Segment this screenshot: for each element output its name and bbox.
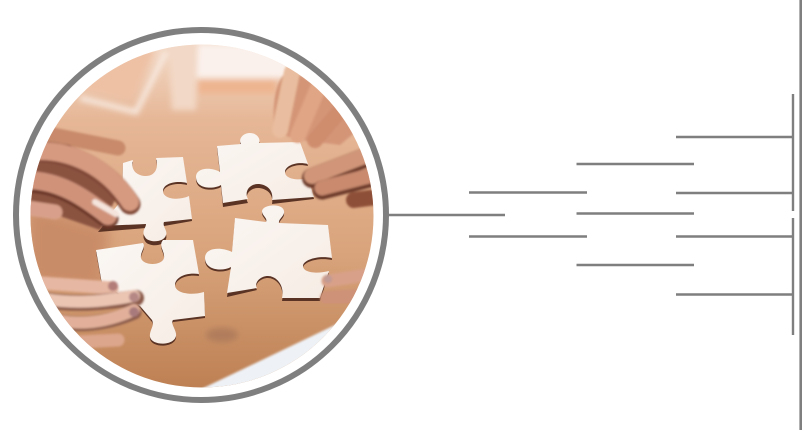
hand: top left <box>25 130 130 230</box>
lower bracket <box>792 218 794 335</box>
photo: hands assembling puzzle pieces <box>25 44 385 392</box>
hand: top right <box>273 68 385 200</box>
level 1 lines <box>469 192 587 236</box>
puzzle piece: bottom right <box>205 205 332 301</box>
hand: bottom right <box>324 272 385 298</box>
white tablet corner at bottom <box>201 323 336 388</box>
arm shadow at left <box>30 216 112 287</box>
right vertical rule <box>799 0 802 430</box>
upper bracket <box>792 94 794 211</box>
level 2 lines <box>576 164 694 265</box>
hand: bottom left <box>28 281 139 342</box>
puzzle piece: top left <box>98 157 192 245</box>
blurred objects on table <box>80 44 300 112</box>
wooden table <box>30 44 375 389</box>
connector lines: tree diagram <box>388 0 801 430</box>
puzzle piece: bottom left <box>96 240 205 346</box>
blurred mark on table <box>206 328 238 342</box>
gray ring around photo <box>16 30 386 400</box>
root connector <box>388 214 505 216</box>
puzzle piece: top right <box>196 133 314 207</box>
level 3 lines <box>676 137 793 294</box>
